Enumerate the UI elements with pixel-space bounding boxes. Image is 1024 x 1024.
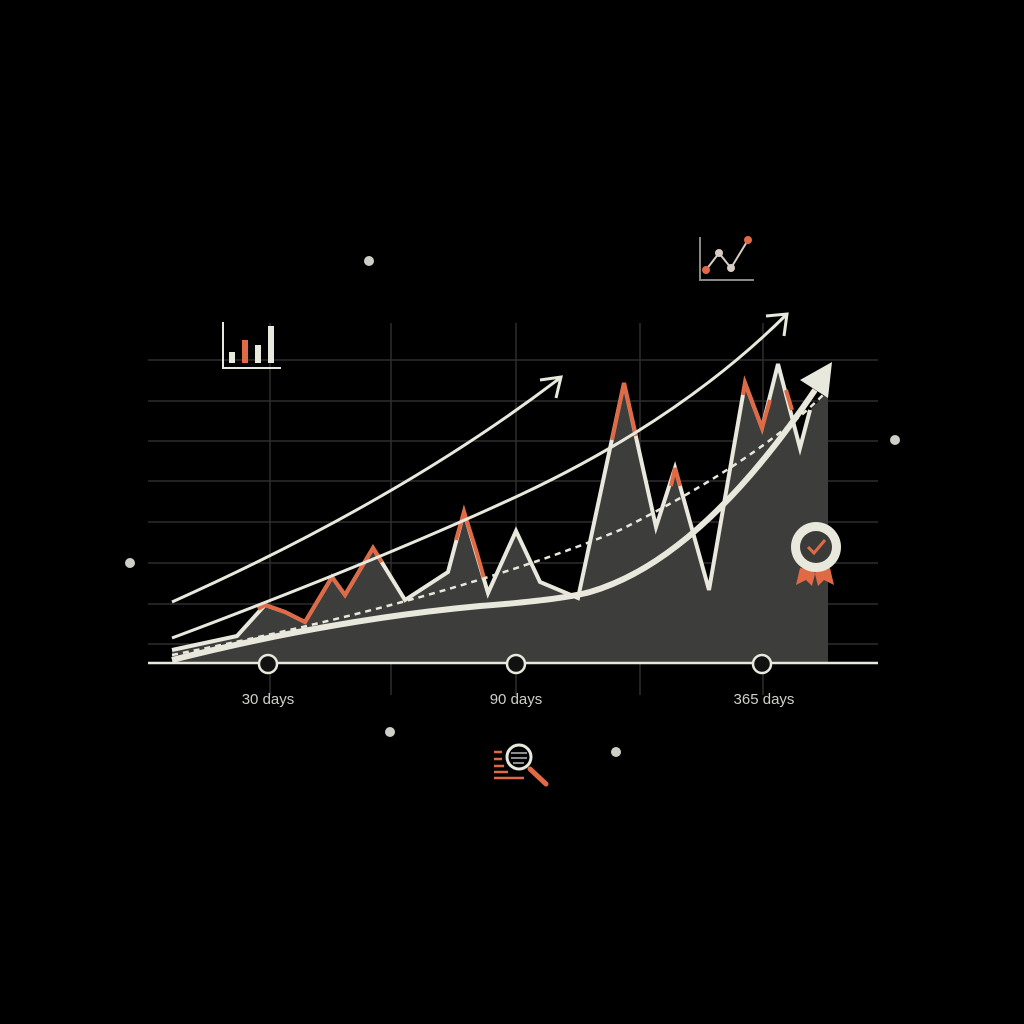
arrow: main growth curve: [172, 362, 832, 660]
chart: jagged line: [172, 364, 810, 650]
icon: badge: [791, 522, 841, 586]
axis labels: 90 days: [490, 691, 542, 708]
axis labels: 365 days: [734, 691, 794, 708]
x axis: [148, 655, 878, 673]
axis labels: 30 days: [242, 691, 294, 708]
icon: bar chart: [223, 322, 281, 368]
decorative dots: [125, 256, 900, 757]
icon: line chart: [700, 236, 754, 280]
arrow: long trend: [172, 314, 787, 638]
dashed trend: [172, 390, 828, 655]
icon: magnifier: [494, 745, 546, 784]
chart: area fill: [172, 364, 828, 663]
axis labels: [242, 691, 794, 708]
arrow: upper trend: [172, 377, 561, 602]
